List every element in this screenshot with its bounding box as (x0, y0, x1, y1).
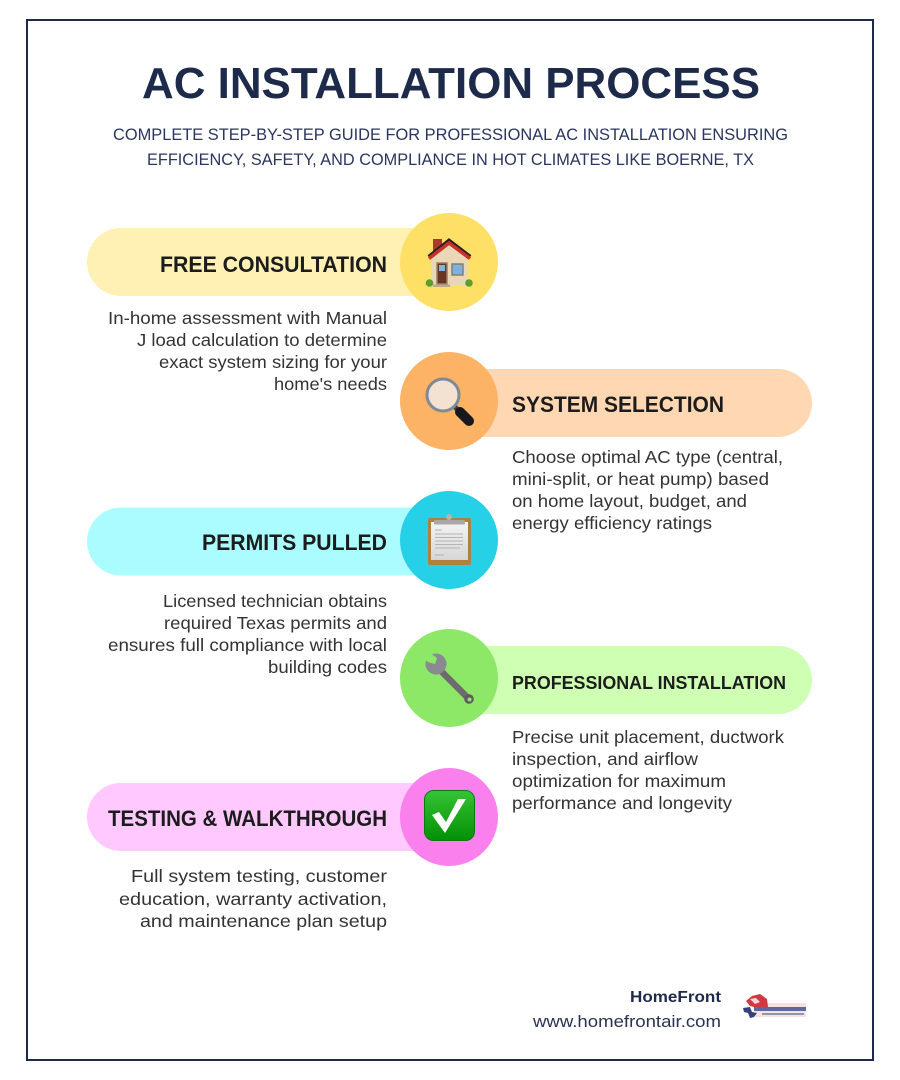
step 1 circle (400, 213, 498, 311)
step 4: professional installation (400, 629, 812, 813)
step 5 banner (87, 783, 430, 851)
step 5 description: education, warranty activation, (119, 889, 387, 909)
step 1 description (108, 308, 387, 394)
step 3 circle (400, 491, 498, 589)
step 4 heading: PROFESSIONAL INSTALLATION (512, 672, 786, 693)
step 5: testing and walkthrough (87, 768, 498, 931)
step 3 description (108, 591, 387, 677)
icon: check mark (424, 790, 474, 840)
step 2 description: energy efficiency ratings (512, 513, 712, 533)
step 2 description: mini-split, or heat pump) based (512, 469, 769, 489)
step 1: free consultation (87, 213, 498, 394)
icon: wrench (421, 649, 474, 704)
step 5 circle (400, 768, 498, 866)
step 2 heading: SYSTEM SELECTION (512, 392, 724, 417)
step 2 description: Choose optimal AC type (central, (512, 447, 783, 467)
step 4 description: optimization for maximum (512, 771, 726, 791)
step 3 description: required Texas permits and (164, 613, 387, 633)
website: www.homefrontair.com (532, 1012, 721, 1031)
step 2 circle (400, 352, 498, 450)
step 3 description: building codes (268, 657, 387, 677)
step 5 description (119, 866, 387, 931)
step 5 heading: TESTING & WALKTHROUGH (108, 806, 387, 831)
icon: clipboard (428, 514, 471, 565)
step 4 banner (470, 646, 812, 714)
step 1 description: J load calculation to determine (137, 330, 387, 350)
step 1 heading: FREE CONSULTATION (160, 252, 387, 277)
logo (743, 994, 806, 1018)
step 3 banner (87, 508, 430, 576)
step 1 description: exact system sizing for your (159, 352, 387, 372)
step 1 description: In-home assessment with Manual (108, 308, 387, 328)
step 3 heading: PERMITS PULLED (202, 530, 387, 555)
step 4 description: inspection, and airflow (512, 749, 698, 769)
title: AC INSTALLATION PROCESS (142, 59, 760, 108)
step 2: system selection (400, 352, 812, 533)
step 4 description: performance and longevity (512, 793, 732, 813)
step 1 banner (87, 228, 430, 296)
step 4 circle (400, 629, 498, 727)
subtitle (113, 125, 788, 169)
step 3 description: ensures full compliance with local (108, 635, 387, 655)
subtitle: EFFICIENCY, SAFETY, AND COMPLIANCE IN HOT CLIMATES LIKE BOERNE, TX (147, 150, 754, 169)
step 1 description: home's needs (274, 374, 387, 394)
step 4 description (512, 727, 784, 813)
footer brand (532, 989, 722, 1031)
step 2 banner (470, 369, 812, 437)
step 4 description: Precise unit placement, ductwork (512, 727, 784, 747)
icon: house (426, 239, 473, 287)
step 2 description (512, 447, 783, 533)
step 3: permits pulled (87, 491, 498, 677)
brand name: HomeFront (630, 989, 722, 1006)
icon: magnifying glass (427, 379, 469, 421)
step 5 description: and maintenance plan setup (140, 911, 387, 931)
step 2 description: on home layout, budget, and (512, 491, 747, 511)
subtitle: COMPLETE STEP-BY-STEP GUIDE FOR PROFESSIONAL AC INSTALLATION ENSURING (113, 125, 788, 144)
step 3 description: Licensed technician obtains (163, 591, 387, 611)
step 5 description: Full system testing, customer (131, 866, 387, 886)
